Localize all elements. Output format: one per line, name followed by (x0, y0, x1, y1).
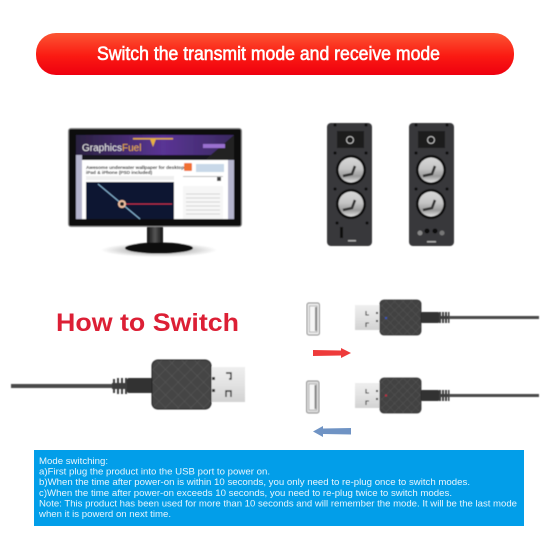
icon: computer monitor (68, 128, 242, 257)
icon: right speaker (409, 123, 454, 246)
icon: left speaker (327, 123, 372, 246)
instruction line b: b)When the time after power-on is within 10 seconds, you only need to re-plug once to switch modes. (39, 477, 470, 488)
icon: USB port bottom (306, 381, 319, 413)
icon: USB port top (307, 303, 320, 335)
icon: large USB dongle (11, 360, 245, 409)
instruction note: Note: This product has been used for more than 10 seconds and will remember the mode. It will be the last mode (39, 498, 517, 510)
icon: computer monitor: Awesome underwater wallpaper for desktop, (86, 165, 185, 170)
instruction line 1: Mode switching: (39, 456, 108, 467)
panel: mode switching instructions (34, 450, 524, 526)
icon: computer monitor: GraphicsFuel (82, 143, 141, 154)
title text: Switch the transmit mode and receive mode (97, 43, 440, 65)
instruction line a: a)First plug the product into the USB port to power on. (39, 466, 270, 478)
arrow: red pointing right (313, 348, 351, 358)
icon: USB dongle bottom with red LED (355, 378, 539, 413)
icon: USB dongle top with blue LED (355, 300, 539, 335)
arrow: blue pointing left (313, 426, 351, 437)
title banner (36, 33, 514, 75)
instruction line c: c)When the time after power-on exceeds 10 seconds, you need to re-plug twice to switch modes. (39, 488, 452, 499)
instruction note continued: when it is powerd on next time. (38, 509, 171, 520)
icon: computer monitor: iPad & iPhone (PSD included) (86, 170, 153, 175)
heading: How to Switch: How to Switch (56, 309, 239, 337)
